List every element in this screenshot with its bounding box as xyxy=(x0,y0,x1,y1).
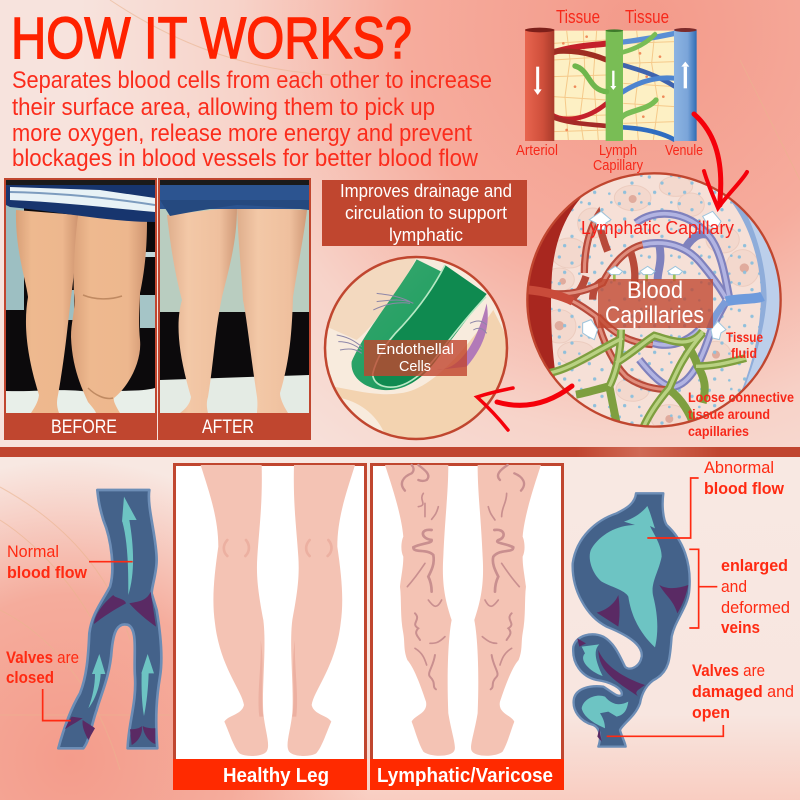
label: blood capillaries xyxy=(598,277,713,329)
label: normal blood flow: blood flow xyxy=(7,563,88,582)
icon: varicose left leg xyxy=(385,465,455,756)
panel: lymphatic varicose leg xyxy=(370,464,564,790)
label: enlarged and deformed veins: enlarged xyxy=(721,556,788,575)
label: endothelial cells: Endothellal xyxy=(376,341,454,358)
icon: healthy right leg xyxy=(288,465,355,756)
label bar: healthy leg xyxy=(173,759,367,790)
label: enlarged and deformed veins: and xyxy=(721,577,747,596)
label: enlarged and deformed veins: deformed xyxy=(721,598,790,617)
label bar: healthy leg: Healthy Leg xyxy=(223,765,329,787)
illustration: capillary network circle xyxy=(526,173,794,439)
diagram: normal vein xyxy=(6,490,161,748)
label: tissue right: Tissue xyxy=(625,7,669,27)
label: endothelial cells: Cells xyxy=(399,358,431,375)
label bar: lymphatic varicose: Lymphatic/Varicose xyxy=(377,765,553,787)
label: tissue fluid: fluid xyxy=(731,345,757,361)
label: valves are closed: closed xyxy=(6,668,54,687)
panel: healthy leg xyxy=(173,464,367,790)
label: tissue fluid: Tissue xyxy=(726,329,763,345)
illustration: endothelial cells circle xyxy=(324,256,510,440)
label: venule: Venule xyxy=(665,142,703,159)
label: enlarged and deformed veins xyxy=(721,556,790,637)
label: lymph capillary: Lymph xyxy=(599,142,637,159)
intro text block: blockages in blood vessels for better blood flow xyxy=(12,145,479,172)
label: before: BEFORE xyxy=(51,417,117,438)
label bar: lymphatic varicose xyxy=(370,759,564,790)
label: normal blood flow: Normal xyxy=(7,542,59,561)
label: loose connective tissue xyxy=(688,389,794,439)
label: lymphatic capillary: Lymphatic Capillary xyxy=(581,218,734,238)
panel: before photo xyxy=(4,178,157,440)
vessel diagram: arteriole, lymph capillary, venule xyxy=(516,7,703,174)
label: normal blood flow xyxy=(7,542,88,582)
intro text block xyxy=(12,67,492,172)
label: abnormal blood flow: Abnormal xyxy=(704,458,774,477)
label: valves are closed: Valves are xyxy=(6,648,79,667)
icon: healthy left leg xyxy=(201,465,268,756)
arrow: venule to capillary circle xyxy=(694,114,747,208)
label: valves are closed xyxy=(6,648,79,687)
label: tissue fluid xyxy=(726,329,763,361)
label: arteriol: Arteriol xyxy=(516,142,558,159)
label: tissue: Tissue xyxy=(556,7,600,27)
intro text block: Separates blood cells from each other to increase xyxy=(12,67,492,94)
label: blood capillaries: Blood xyxy=(627,277,683,304)
intro text block: more oxygen, release more energy and prevent xyxy=(12,120,472,147)
label: valves damaged and open: open xyxy=(692,703,730,722)
icon: varicose right leg xyxy=(471,465,541,756)
label: after: AFTER xyxy=(202,417,254,438)
arrow: capillary circle to endothelial circle xyxy=(477,386,572,430)
label: abnormal blood flow xyxy=(704,458,785,498)
divider band xyxy=(0,447,800,457)
label: lymph capillary xyxy=(593,142,643,174)
callout: improves drainage xyxy=(322,180,527,246)
label: valves damaged and open: Valves are xyxy=(692,661,765,680)
title: HOW IT WORKS? xyxy=(11,6,412,71)
callout: improves drainage: circulation to support xyxy=(345,203,507,223)
label: enlarged and deformed veins: veins xyxy=(721,618,760,637)
label: abnormal blood flow: blood flow xyxy=(704,479,785,498)
label: loose connective tissue: capillaries xyxy=(688,423,749,439)
panel: after photo xyxy=(158,178,311,440)
label: lymph capillary: Capillary xyxy=(593,157,643,174)
label: endothelial cells xyxy=(364,340,467,376)
label: loose connective tissue: tissue around xyxy=(688,406,770,422)
callout: improves drainage: lymphatic xyxy=(389,225,463,245)
label: valves damaged and open: damaged and xyxy=(692,682,794,701)
label: valves damaged and open xyxy=(692,661,794,722)
callout: improves drainage: Improves drainage and xyxy=(340,181,512,201)
intro text block: their surface area, allowing them to pick up xyxy=(12,94,435,121)
label: blood capillaries: Capillaries xyxy=(605,302,704,329)
diagram: abnormal vein xyxy=(573,458,794,747)
